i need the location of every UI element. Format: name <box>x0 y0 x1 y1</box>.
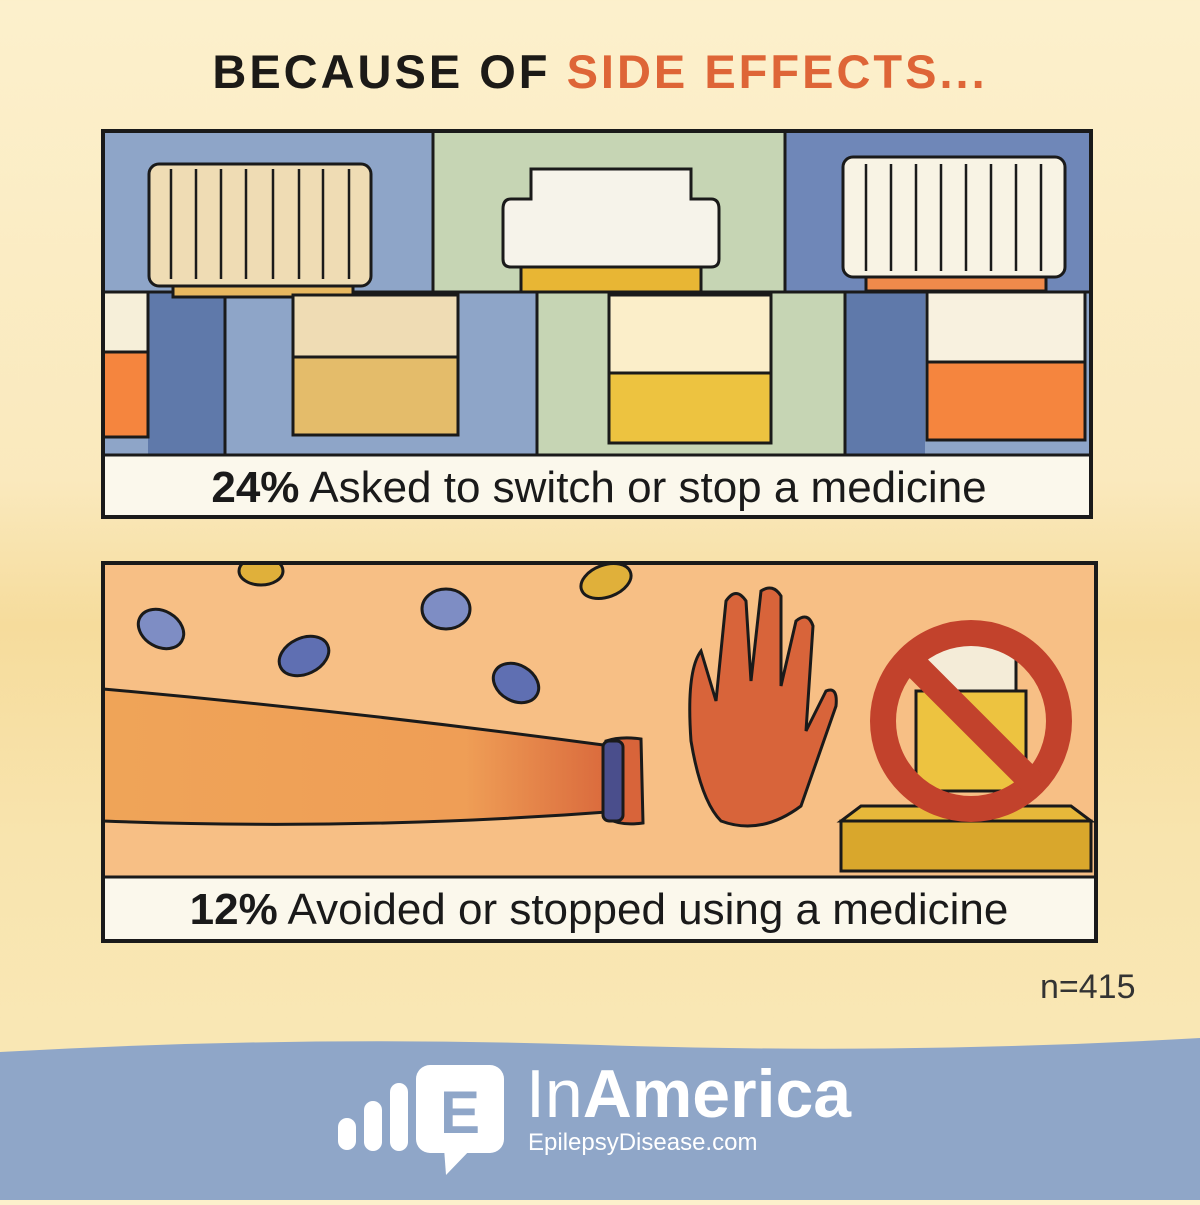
logo: E <box>440 1079 480 1146</box>
icon: bottles bottom row <box>103 292 1085 443</box>
icon: prohibited bottle <box>841 633 1091 871</box>
footer band <box>0 1038 1200 1200</box>
icon: pills <box>131 557 636 711</box>
panel: avoided or stopped medicine <box>101 561 1098 943</box>
panel: switch or stop medicine: 24% Asked to switch or stop a medicine <box>211 463 987 512</box>
panel: switch or stop medicine <box>101 129 1093 519</box>
logo: EpilepsyDisease.com <box>528 1129 757 1156</box>
icon: striped cap left <box>149 164 371 297</box>
logo <box>338 1056 852 1175</box>
icon: white child-proof cap <box>503 169 719 292</box>
title: BECAUSE OF SIDE EFFECTS... <box>212 45 988 98</box>
panel: avoided or stopped medicine: 12% Avoided or stopped using a medicine <box>190 885 1008 934</box>
icon: striped cap right <box>843 157 1065 291</box>
logo: InAmerica <box>526 1056 851 1132</box>
caption: 12% <box>103 877 1096 941</box>
sample size note: n=415 <box>1040 968 1136 1006</box>
caption: 24% <box>103 455 1091 517</box>
